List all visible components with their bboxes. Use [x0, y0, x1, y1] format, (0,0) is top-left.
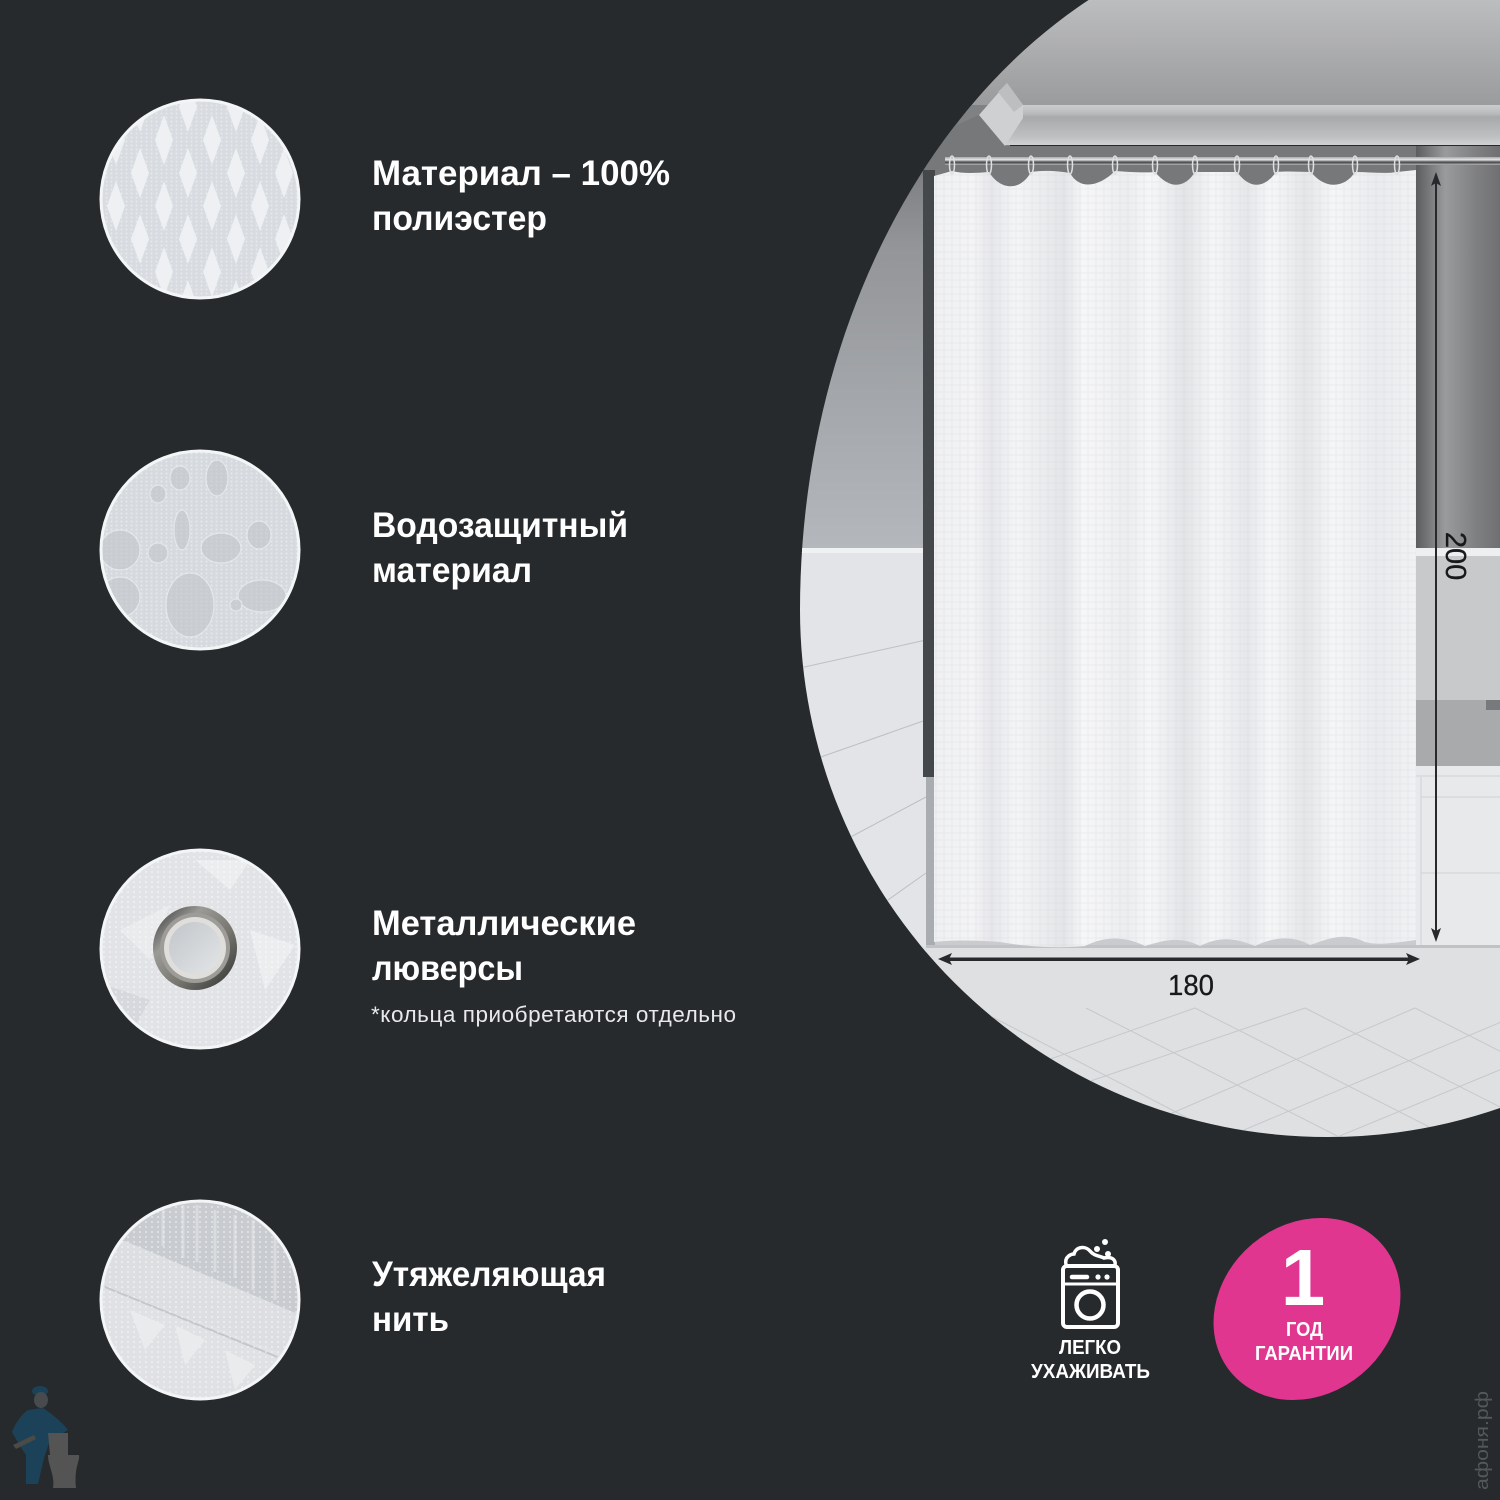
feature 4: text: нить: [372, 1300, 449, 1339]
feature 1: text: полиэстер: [372, 199, 547, 238]
arrow: width: [938, 953, 1420, 965]
feature 3: text: [372, 904, 636, 988]
feature 4: text: Утяжеляющая: [372, 1255, 606, 1294]
warranty badge: ГАРАНТИИ: [1255, 1343, 1353, 1365]
water drops: [100, 460, 286, 637]
upper left wall corner: [934, 105, 1010, 155]
feature 2: text: Водозащитный: [372, 506, 628, 545]
grommet: [153, 906, 237, 990]
curtain: [934, 170, 1416, 947]
warranty badge: 1: [1281, 1233, 1325, 1322]
feature 4: text: [372, 1255, 606, 1339]
curtain rings: [950, 156, 1400, 174]
feature 1: material swatch: [100, 99, 300, 299]
care label: [1031, 1337, 1150, 1383]
floor: [921, 945, 1500, 1137]
feature 3: text: Металлические: [372, 904, 636, 943]
crown moulding: [979, 83, 1500, 146]
feature 3: note: *кольца приобретаются отдельно: [371, 1002, 736, 1027]
feature 3: text: люверсы: [372, 949, 523, 988]
feature 3: grommet swatch: [100, 850, 300, 1050]
arrow: height: [1431, 172, 1441, 942]
feature 2: water swatch: [100, 450, 300, 650]
wainscot tiles left: [800, 548, 926, 968]
icon: washing machine: [1063, 1239, 1118, 1327]
feature 1: text: [372, 154, 670, 238]
feature 1: text: Материал – 100%: [372, 154, 670, 193]
dimension: 200: 200: [1439, 532, 1471, 580]
warranty badge: [1177, 1180, 1437, 1438]
warranty badge: ГОД: [1286, 1319, 1323, 1341]
backdrop behind curtain: [935, 936, 1416, 945]
wall above wainscot: [800, 146, 935, 550]
care label: ЛЕГКО: [1059, 1337, 1121, 1359]
watermark plumber logo: [12, 1386, 79, 1488]
niche shadow: [923, 170, 935, 777]
ceiling: [966, 0, 1500, 112]
dimension: 180: 180: [1168, 970, 1214, 1002]
wainscot right: [1416, 548, 1500, 948]
feature 2: text: [372, 506, 628, 590]
watermark text: афоня.рф: [1472, 1391, 1492, 1490]
care label: УХАЖИВАТЬ: [1031, 1361, 1150, 1383]
feature 4: weighted hem swatch: [100, 1200, 300, 1400]
feature 2: text: материал: [372, 551, 532, 590]
bathroom photo: [800, 0, 1500, 1146]
curtain rod: [945, 157, 1500, 165]
